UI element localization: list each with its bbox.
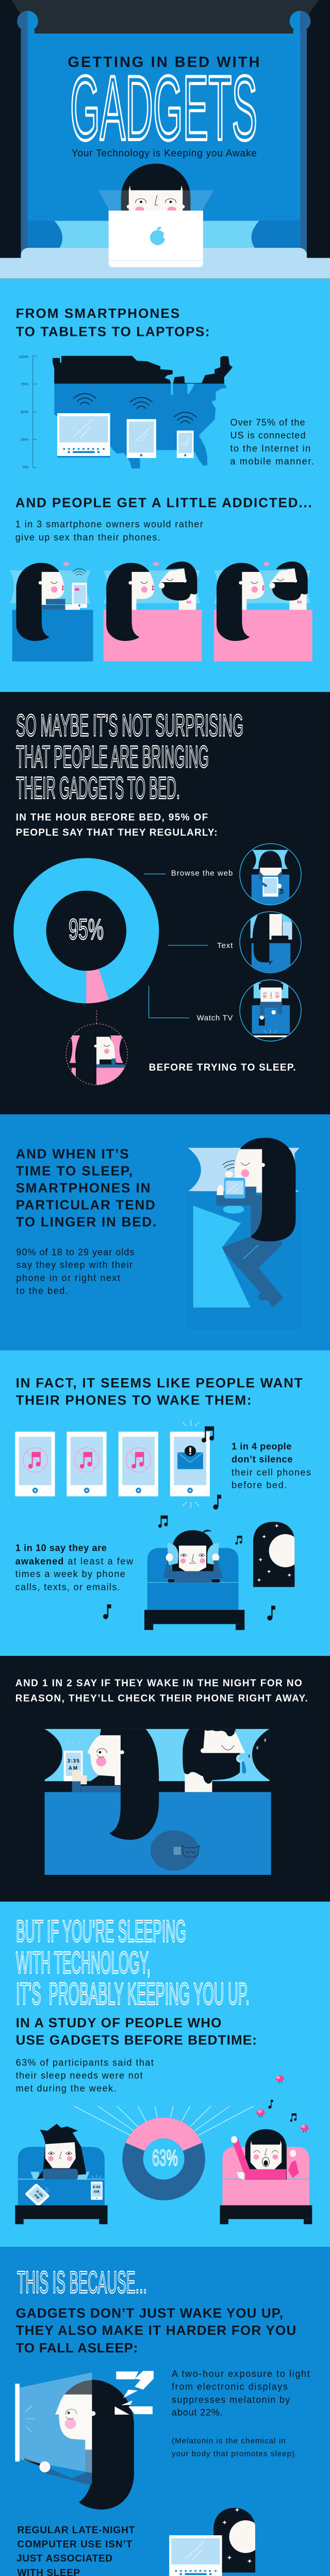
panel: smartphones linger in bed [0,1114,330,1350]
heading: keeping you up [16,1914,250,2011]
heading: when it's time to sleep: TO LINGER IN BED. [16,1214,156,1230]
circle outlines [240,844,301,1041]
snore letters: z [264,1737,267,1742]
icon: dashed circle reading before sleep [66,1010,127,1086]
chart axis: percent scale: 50% [21,410,28,414]
text: 1 in 10: times a week by phone [15,1569,125,1579]
icon: texting [251,914,292,975]
text: late-night computer use: JUST ASSOCIATED [16,2553,112,2564]
text: 1 in 3 [15,519,203,543]
subheading: gadgets don't just wake you up [16,2305,296,2355]
heading: when it's time to sleep: AND WHEN IT’S [16,1146,129,1161]
subheading: 95 percent: PEOPLE SAY THAT THEY REGULARLY: [16,827,218,838]
text: 1 in 10: awakened [15,1556,63,1566]
text: 90 percent: phone in or right next [16,1273,120,1283]
panel: checking phone at night [0,1656,330,1902]
label: text [168,941,233,950]
text: 1 in 4: before bed. [232,1480,287,1490]
text: 1 in 4: their cell phones [232,1467,311,1478]
subheading: study: USE GADGETS BEFORE BEDTIME: [16,2032,257,2047]
icon: browsing on tablet [252,850,289,906]
illustration: couple kissing with phone [104,562,202,662]
label: text: Text [217,941,233,950]
chart: US map filled to 75 percent with devices [53,356,233,468]
illustration: row of silenced phones [15,1420,221,1528]
text: 63 percent [16,2058,154,2094]
text: 1 in 10: 1 in 10 say they are [15,1543,107,1553]
text: 75 percent connected: to the Internet in [230,443,310,453]
heading: when it's time to sleep [16,1146,156,1230]
text: 90 percent: say they sleep with their [16,1260,133,1270]
device clock text: 6:00 [36,2190,43,2198]
donut chart: 95 percent: 95% [69,913,104,946]
text: 90 percent: 90% of 18 to 29 year olds [16,1247,134,1257]
device clock text: AM [94,2190,100,2194]
donut chart: 95 percent [30,874,143,1004]
subheading: 95 percent [16,812,218,838]
panel: bedtime habits [13,714,302,1085]
panel: devices and addiction [0,279,330,692]
phone time: 3:35 [68,1758,79,1764]
text: 90 percent: to the bed. [16,1285,68,1296]
text: melatonin: your body that promotes sleep). [172,2449,297,2459]
text: late-night computer use: REGULAR LATE-NIGHT [18,2525,135,2536]
subheading: 95 percent: IN THE HOUR BEFORE BED, 95% OF [16,812,208,823]
illustration: moonlit window [253,1522,295,1587]
text: 1 in 10 [15,1543,134,1592]
text: 1 in 10: at least a few [68,1556,134,1566]
heading: from smartphones: FROM SMARTPHONES [16,306,179,321]
title: getting in bed with: GETTING IN BED WITH [68,54,259,71]
phone time [68,1758,79,1771]
text: melatonin: A two-hour exposure to light [172,2368,310,2379]
heading: 1 in 2 [15,1678,308,1704]
snore letters: z [256,1745,259,1750]
text: 75 percent connected [230,417,314,467]
text: late-night computer use [16,2525,135,2576]
text: 1 in 10: calls, texts, or emails. [15,1582,120,1592]
illustration: tired person with devices in bed [15,2124,108,2224]
text: 1 in 3: 1 in 3 smartphone owners would rather [15,519,203,530]
text: 75 percent connected: Over 75% of the [230,417,305,428]
heading: phones wake them [16,1375,303,1408]
donut chart: 63 percent: 63% [152,2145,178,2171]
text: 1 in 4: don’t silence [232,1454,292,1465]
text: 63 percent: their sleep needs were not [16,2070,143,2080]
text: before trying to sleep: BEFORE TRYING TO SLEEP. [149,1062,296,1073]
illustration: person facing bright screen [15,2371,154,2510]
icons: music notes [103,1536,275,1620]
heading: phones wake them: IN FACT, IT SEEMS LIKE PEOPLE WANT [16,1375,303,1391]
subheading: study [16,2015,257,2047]
label: watch tv: Watch TV [197,1014,233,1023]
heading: 1 in 2: REASON, THEY’LL CHECK THEIR PHONE RIGHT AWAY. [15,1693,308,1704]
illustration: computer and night window [169,2507,262,2576]
heading: phones wake them: THEIR PHONES TO WAKE THEM: [16,1392,252,1408]
illustration: rested person in pink bed [220,2129,312,2224]
text: melatonin: from electronic displays [172,2382,288,2392]
subheading: study: IN A STUDY OF PEOPLE WHO [16,2015,221,2030]
illustration: woman with phone in bed [10,562,93,662]
chart axis: percent scale: 0% [23,465,28,469]
donut chart: 63 percent [74,2106,254,2190]
heading: when it's time to sleep: PARTICULAR TEND [16,1197,155,1213]
subtitle: Your Technology is Keeping you Awake [72,148,257,159]
heading: from smartphones [16,306,210,339]
heading: people get addicted: AND PEOPLE GET A LITTLE ADDICTED... [15,495,312,511]
phone time: AM [69,1766,77,1771]
panel: study of gadget users [0,1902,330,2247]
heading: when it's time to sleep: SMARTPHONES IN [16,1180,150,1196]
subheading: gadgets don't just wake you up: TO FALL ASLEEP: [16,2340,138,2355]
chart axis: percent scale [19,354,37,469]
text: melatonin: (Melatonin is the chemical in [172,2436,286,2445]
icon: watching tv [252,982,290,1037]
heading: when it's time to sleep: TIME TO SLEEP, [16,1163,133,1178]
text: 1 in 4 [232,1441,311,1490]
device clock text: 6:00 [93,2185,101,2189]
heading: keeping you up: WITH TECHNOLOGY, [16,1945,151,1980]
text: 1 in 3: give up sex than their phones. [15,532,160,543]
text: 75 percent connected: US is connected [230,430,305,440]
label: watch tv [149,986,233,1023]
text: melatonin: suppresses melatonin by [172,2395,290,2405]
chart axis: percent scale: 100% [19,354,28,359]
illustration: person in bed covering ears [144,1530,244,1630]
heading: not surprising [16,708,243,805]
snore letters [248,1737,267,1758]
illustration: person asleep with phone in bed [188,1138,300,1329]
chart axis: percent scale: 25% [21,437,28,442]
heading: from smartphones: TO TABLETS TO LAPTOPS: [16,324,210,339]
label: browse the web: Browse the web [171,869,233,877]
heading: 1 in 2: AND 1 IN 2 SAY IF THEY WAKE IN THE NIGHT FOR NO [15,1678,302,1689]
illustration: girl with laptop in bed [0,164,330,279]
chart axis: percent scale: 75% [21,382,28,386]
illustration: second couple kissing with phone [214,562,312,662]
text: 63 percent: met during the week. [16,2083,117,2094]
text: 63 percent: 63% of participants said that [16,2058,154,2068]
subheading: gadgets don't just wake you up: THEY ALSO MAKE IT HARDER FOR YOU [16,2323,296,2338]
panel: hero header [0,0,330,279]
device clock text: AM [33,2194,40,2200]
panel: harder to fall asleep [0,2247,330,2576]
text: melatonin [172,2368,310,2459]
device clock text [32,2185,101,2201]
subheading: gadgets don't just wake you up: GADGETS DON’T JUST WAKE YOU UP, [16,2305,283,2320]
icons: birds and notes [256,2075,309,2133]
text: late-night computer use: COMPUTER USE ISN’T [18,2539,133,2550]
bed headboard and ceiling [11,0,319,258]
illustration: couple in bed with phone at night [45,1729,271,1875]
text: 1 in 4: 1 in 4 people [232,1441,291,1451]
snore letters: z [248,1753,251,1758]
panel: phones wake them [0,1350,330,1656]
panel: harder to fall asleep: THIS IS BECAUSE... [17,2265,147,2300]
text: 75 percent connected: a mobile manner. [230,456,314,467]
text: melatonin: about 22%. [172,2408,223,2418]
text: 90 percent [16,1247,134,1296]
